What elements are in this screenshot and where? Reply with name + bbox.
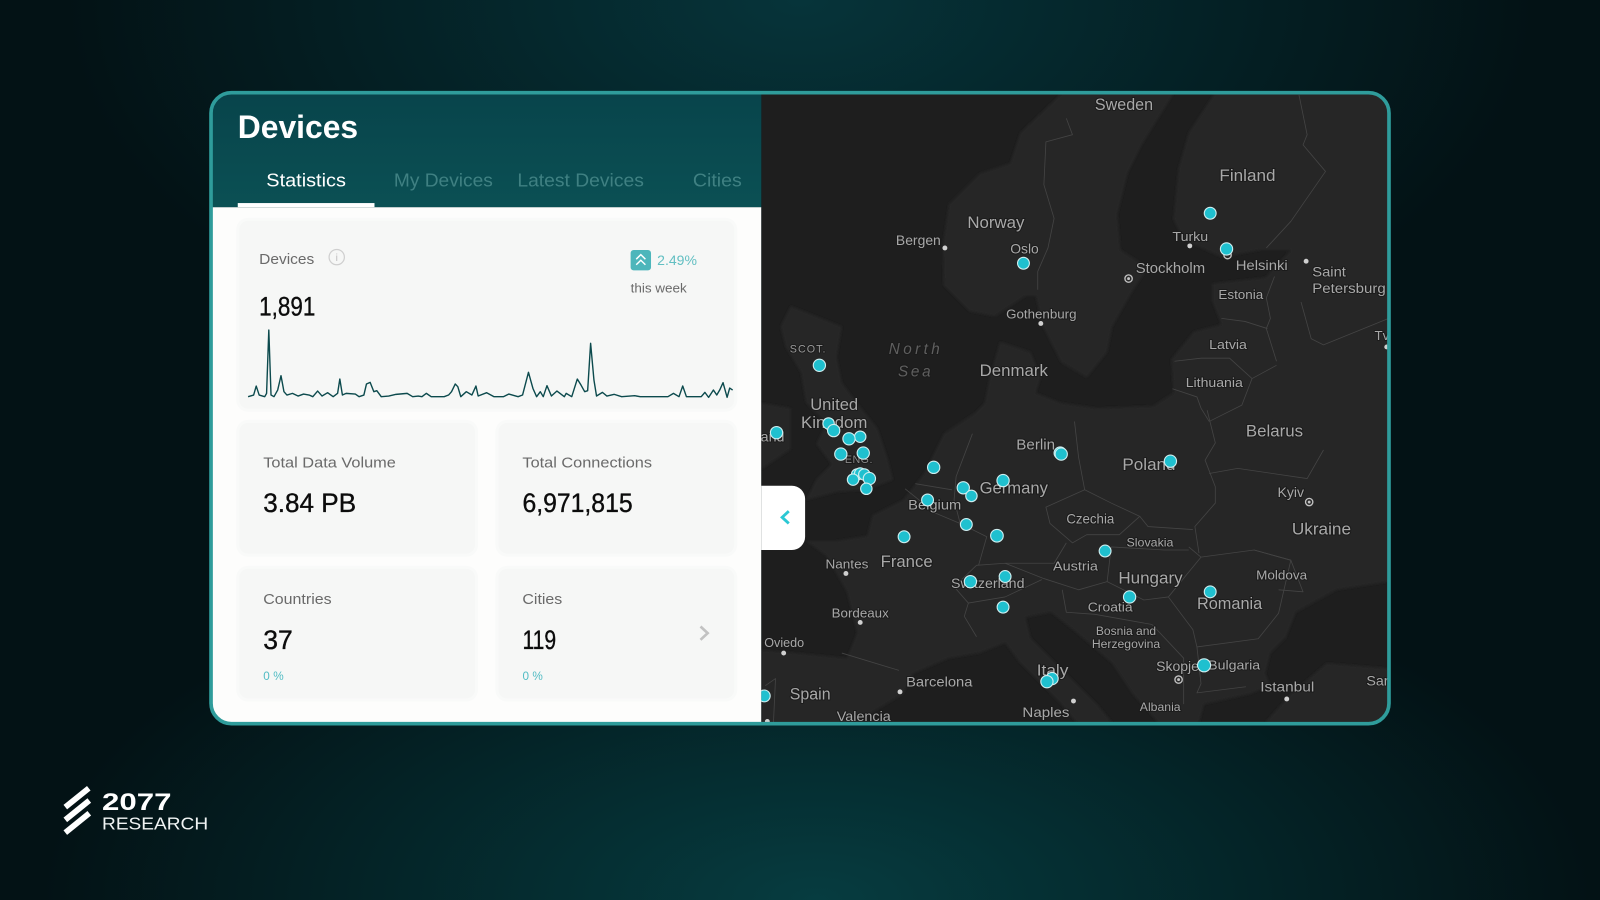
map labels: Ireland: [741, 429, 785, 445]
map labels: Bergen: [896, 233, 941, 248]
map labels: Gothenburg: [1006, 306, 1077, 321]
devices label: Devices: [259, 252, 314, 268]
map labels: Nantes: [826, 556, 869, 571]
collapse toggle: [761, 486, 805, 550]
card: countries: 0 %: [263, 670, 284, 683]
map labels: Bordeaux: [832, 605, 889, 620]
card: cities: [522, 593, 710, 680]
map labels: Valencia: [837, 709, 891, 725]
map labels: Germany: [980, 479, 1049, 497]
card: total data volume: 3.84 PB: [263, 488, 356, 518]
tab: my devices: My Devices: [394, 170, 493, 191]
logo: 2077 research: [65, 788, 208, 834]
logo: 2077 research: RESEARCH: [102, 814, 208, 834]
map labels: Saint: [1312, 265, 1346, 280]
city dots: [765, 243, 1389, 724]
map labels: Herzegovina: [1092, 638, 1161, 651]
map labels: Skopje: [1156, 659, 1199, 675]
map labels: Bosnia and: [1096, 625, 1156, 638]
map labels: Bulgaria: [1208, 658, 1261, 673]
icon: chevron right: [701, 627, 708, 640]
card: total data volume: Total Data Volume: [263, 455, 396, 471]
map labels: Naples: [1022, 705, 1069, 721]
trend percent: 2.49%: [657, 253, 697, 269]
map labels: Lithuania: [1186, 375, 1244, 390]
card: countries: Countries: [263, 592, 332, 608]
map labels: Helsinki: [1236, 258, 1288, 274]
map labels: Turku: [1172, 229, 1208, 244]
tab: latest devices: Latest Devices: [517, 170, 644, 191]
card: total connections: Total Connections: [522, 455, 652, 471]
map labels: Tv: [1374, 328, 1390, 343]
icon: trend up: [631, 250, 651, 270]
panel header: [212, 94, 761, 207]
card: countries: 37: [263, 625, 293, 655]
card: countries: [264, 593, 332, 680]
map labels: ENG.: [845, 454, 872, 466]
card: cities: 0 %: [522, 670, 543, 683]
map panel: [741, 94, 1390, 725]
map labels: Estonia: [1218, 287, 1264, 302]
map labels: Poland: [1122, 456, 1176, 474]
map labels: SCOT.: [790, 344, 826, 356]
map labels: Sar: [1366, 673, 1389, 689]
device markers: [758, 207, 1233, 702]
devices value: 1,891: [259, 291, 315, 321]
map labels: Belarus: [1246, 422, 1303, 440]
map labels: Sweden: [1095, 96, 1153, 114]
map labels: Belgium: [908, 497, 961, 512]
map labels: Albania: [1140, 700, 1181, 714]
card: total connections: 6,971,815: [522, 488, 633, 518]
card: total data volume: [264, 456, 396, 512]
trend period: this week: [631, 280, 687, 295]
map labels: Kingdom: [801, 414, 867, 432]
logo mark: [65, 788, 89, 833]
map labels: Oviedo: [764, 635, 804, 650]
map labels: Stockholm: [1136, 261, 1205, 277]
icon: info: i: [336, 253, 338, 264]
map labels: Berlin: [1016, 438, 1055, 454]
card: cities: 119: [522, 625, 556, 655]
icon: info: [329, 249, 344, 265]
map labels: France: [881, 553, 933, 571]
map labels: Czechia: [1066, 512, 1115, 527]
active tab underline: [238, 203, 374, 207]
map labels: Kyiv: [1278, 485, 1304, 500]
card: cities: Cities: [522, 592, 562, 608]
tab: cities: Cities: [693, 170, 742, 191]
map labels: Istanbul: [1260, 679, 1314, 695]
dashboard card: [211, 93, 1390, 725]
map labels: Moldova: [1256, 568, 1308, 583]
map labels: Switzerland: [951, 576, 1024, 591]
map labels: Croatia: [1088, 599, 1133, 614]
map labels: Ukraine: [1292, 520, 1351, 538]
map labels: [741, 96, 1390, 725]
map labels: Finland: [1219, 167, 1276, 185]
logo wordmark: 2077: [102, 789, 171, 816]
land masses: [761, 94, 1389, 722]
map labels: Barcelona: [906, 674, 973, 690]
map labels: Denmark: [980, 362, 1049, 380]
map labels: Italy: [1037, 663, 1069, 680]
map labels: Romania: [1197, 595, 1263, 613]
tab: statistics: Statistics: [266, 170, 346, 191]
heading: Devices: [238, 108, 358, 145]
map labels: Sea: [898, 364, 931, 381]
icon: chevron left: [782, 511, 789, 523]
card: total connections: [522, 456, 652, 516]
map labels: Austria: [1053, 559, 1099, 574]
map labels: Hungary: [1118, 569, 1184, 587]
card: devices: [248, 248, 733, 398]
panel border: [211, 93, 1389, 724]
map labels: United: [810, 396, 858, 414]
country borders: [765, 95, 1389, 722]
map labels: Latvia: [1209, 337, 1248, 352]
map labels: Norway: [967, 214, 1025, 232]
map labels: Petersburg: [1312, 281, 1386, 297]
map labels: North: [889, 341, 940, 358]
map labels: Oslo: [1010, 242, 1039, 258]
map labels: Spain: [790, 686, 831, 704]
left panel body: [212, 207, 761, 722]
line chart: devices: [248, 330, 733, 397]
map labels: Slovakia: [1127, 536, 1174, 550]
